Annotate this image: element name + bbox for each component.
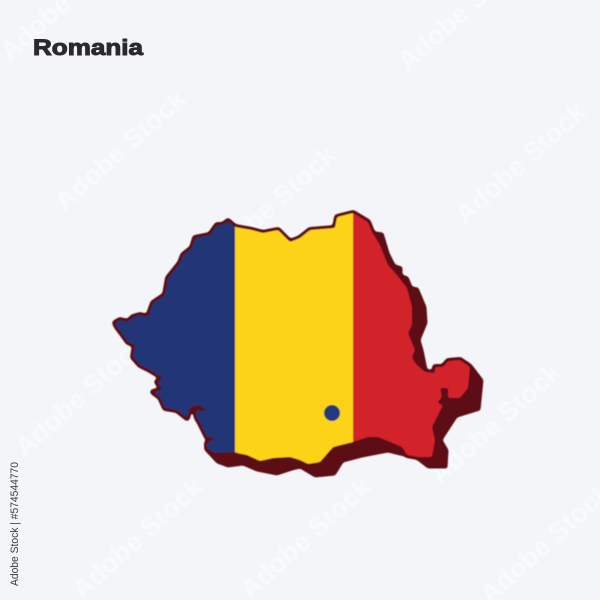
capital marker dot: [324, 405, 340, 421]
flag fill: blue, yellow, red stripes: [115, 212, 470, 465]
watermark pattern: Adobe Stock: [49, 83, 192, 216]
watermark pattern: Adobe Stock: [449, 96, 592, 229]
watermark pattern: Adobe Stock: [9, 329, 152, 462]
title: Romania: [33, 35, 144, 60]
map shadow and outline: [115, 213, 483, 477]
watermark pattern: Adobe Stock: [252, 291, 395, 424]
stock id caption: Adobe Stock | #574544770: [9, 462, 21, 586]
watermark pattern: Adobe Stock: [199, 139, 342, 272]
watermark pattern: Adobe Stock: [424, 356, 567, 489]
map of Romania: [100, 200, 483, 480]
